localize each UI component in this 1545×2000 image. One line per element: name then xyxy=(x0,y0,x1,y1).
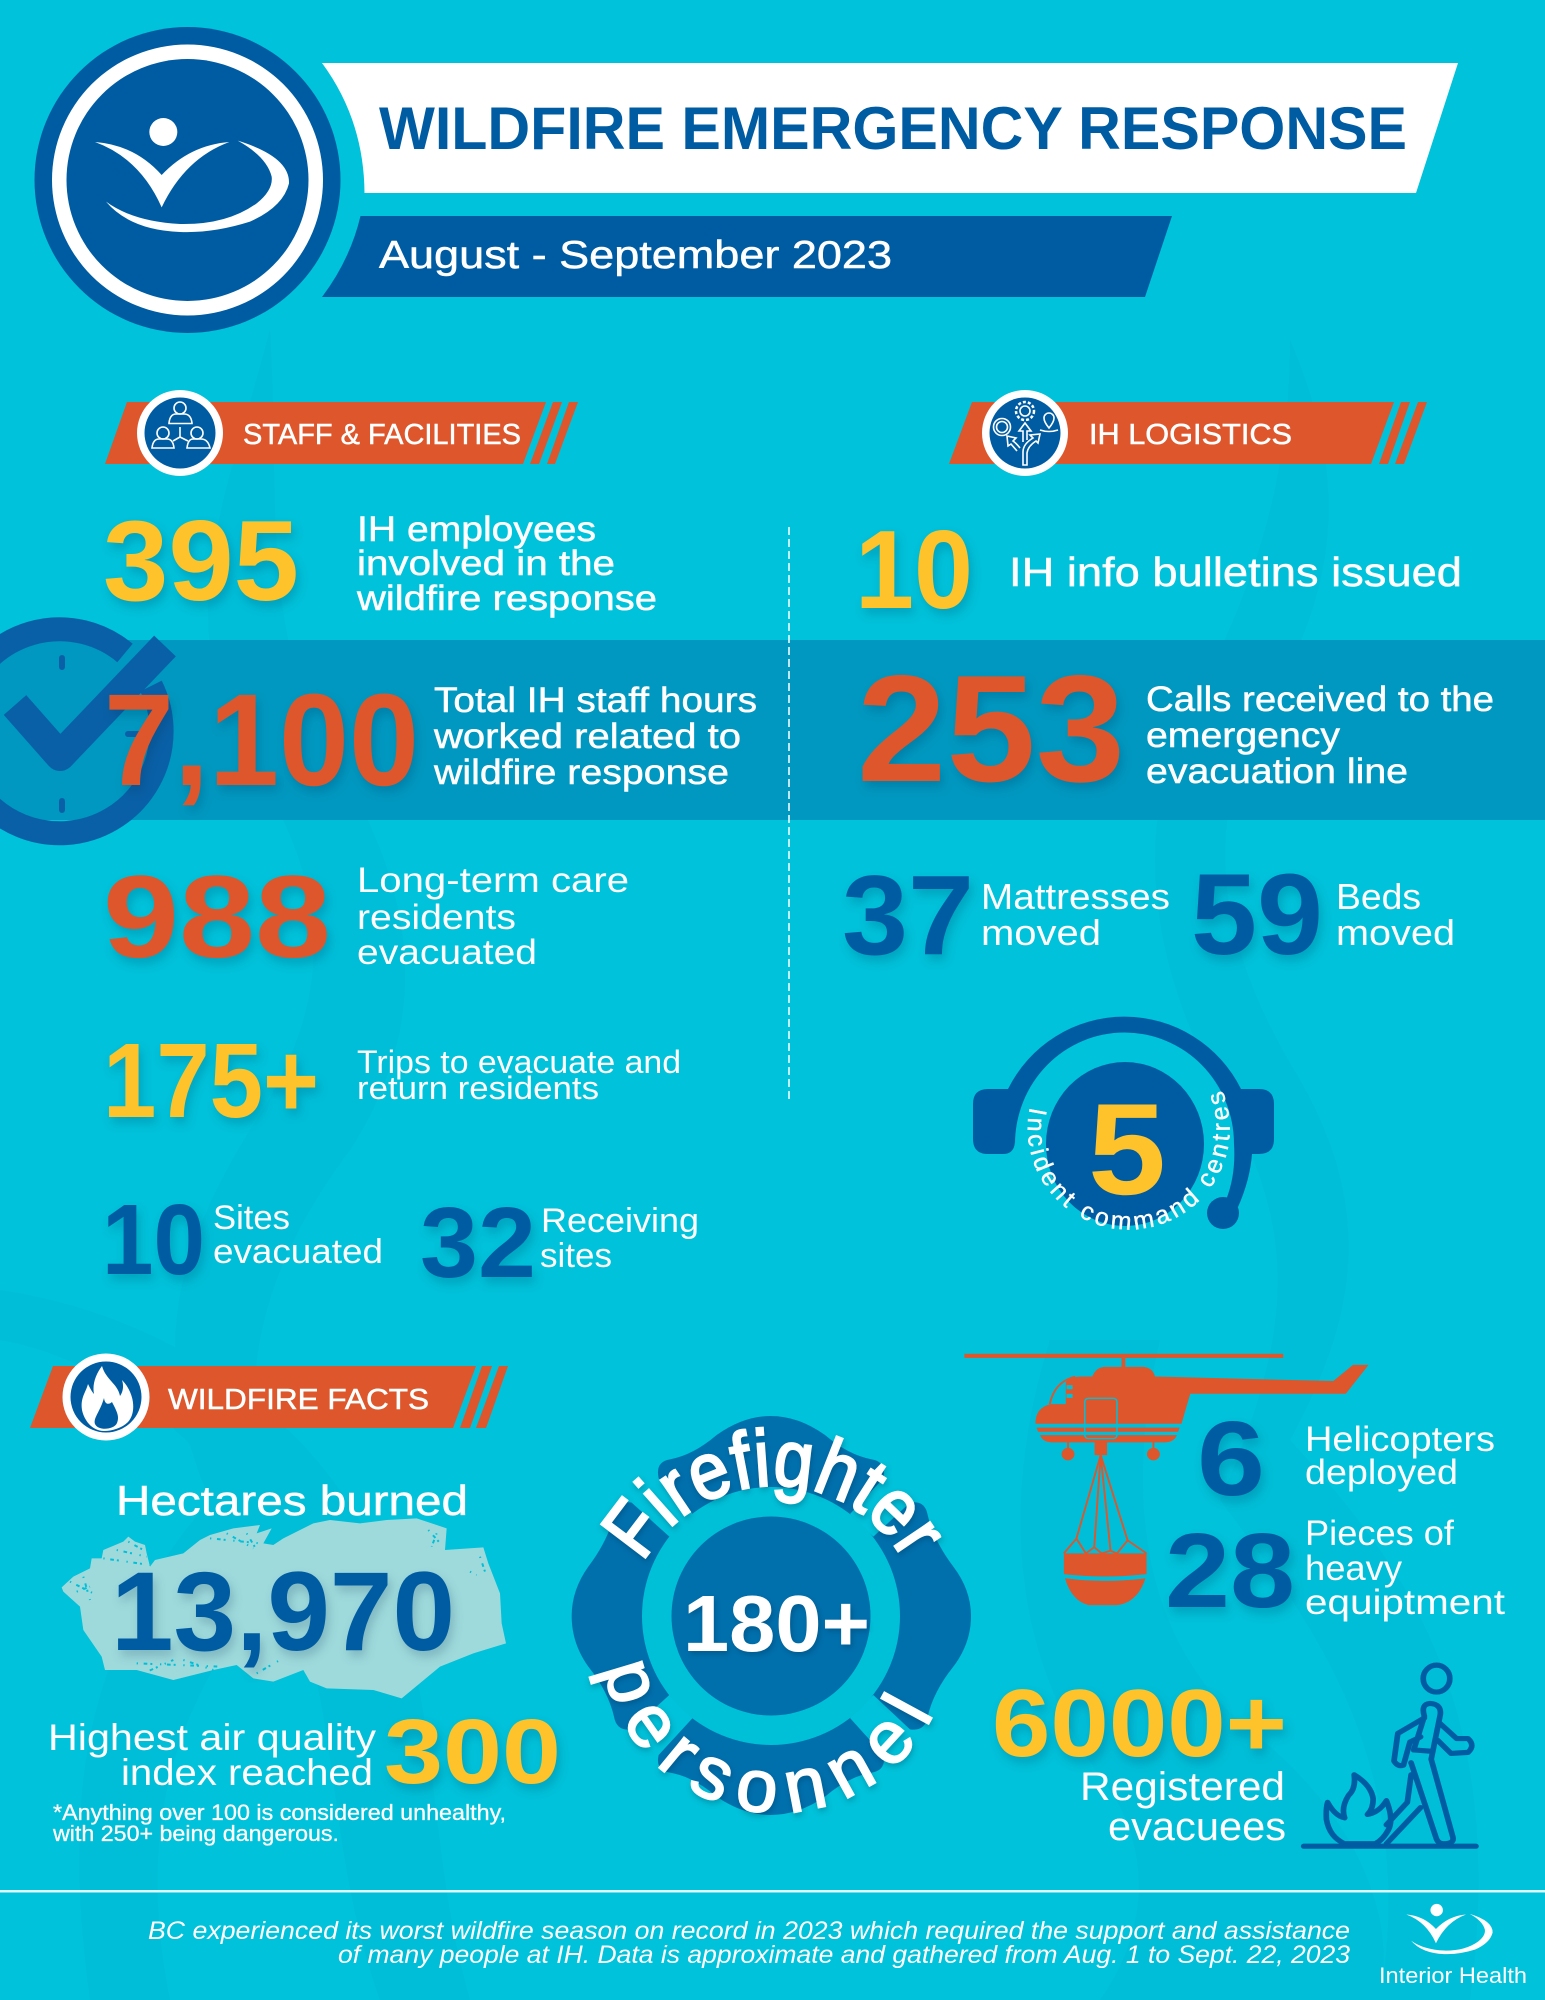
stat: 28 heavy equipment: Pieces of xyxy=(1305,1514,1454,1553)
stat: 32 receiving sites xyxy=(420,1187,699,1299)
stat: 10 sites xyxy=(102,1184,383,1296)
stat: 59 beds: Beds xyxy=(1336,876,1421,917)
stat: 175+ trips: Trips to evacuate and xyxy=(357,1044,681,1080)
stat: 395 employees: wildfire response xyxy=(356,579,657,618)
stat: 28 heavy equipment: equiptment xyxy=(1305,1583,1505,1622)
stat: 253 calls: 253 xyxy=(857,644,1125,814)
stat: 32 receiving sites: sites xyxy=(540,1237,612,1275)
stat: air quality 300: Highest air quality xyxy=(48,1717,377,1758)
stat: 253 calls xyxy=(857,644,1494,814)
label: incident command centres: Incident command centres xyxy=(1027,1092,1230,1230)
stat: 988 residents: Long-term care xyxy=(357,861,629,900)
date banner xyxy=(322,216,1172,297)
footer note: of many people at IH. Data is approximate and gathered from Aug. 1 to Sept. 22, 2023 xyxy=(338,1941,1350,1969)
stat: 7,100 hours: 7,100 xyxy=(104,666,419,813)
stat: 10 bulletins: IH info bulletins issued xyxy=(1009,549,1462,595)
heading: staff and facilities: STAFF & FACILITIES xyxy=(243,419,521,451)
stat: 59 beds xyxy=(1191,851,1455,979)
stat: 988 residents xyxy=(103,851,629,982)
footnote: with 250+ being dangerous. xyxy=(52,1821,339,1846)
stat: air quality 300: index reached xyxy=(121,1752,373,1793)
footer rule xyxy=(0,1890,1545,1892)
stat: 10 sites: evacuated xyxy=(213,1233,383,1271)
stat: 37 mattresses: Mattresses xyxy=(981,876,1170,917)
heading: IH logistics xyxy=(949,390,1427,476)
stat: 175+ trips: return residents xyxy=(357,1070,599,1106)
stat: 395 employees: 395 xyxy=(103,498,299,625)
stat: 10 bulletins: 10 xyxy=(855,508,973,632)
stat: 7,100 hours xyxy=(104,666,757,813)
stat: 10 sites: 10 xyxy=(102,1184,205,1296)
stat: 6000+ evacuees: Registered xyxy=(1080,1765,1285,1809)
stat: 6 helicopters: 6 xyxy=(1197,1400,1265,1518)
stat: 6000+ evacuees: evacuees xyxy=(1108,1805,1286,1849)
stat: air quality 300 xyxy=(48,1701,561,1846)
stat: 32 receiving sites: 32 xyxy=(420,1187,536,1299)
footer logo xyxy=(1379,1904,1527,1988)
stat: 6 helicopters: deployed xyxy=(1305,1453,1458,1492)
stat: 10 sites: Sites xyxy=(213,1199,290,1237)
stat: 6000+ evacuees: 6000+ xyxy=(992,1670,1287,1777)
divider xyxy=(788,527,790,1100)
icon: clock with check mark xyxy=(0,629,165,833)
icon: flame xyxy=(82,1366,133,1431)
stat: 7,100 hours: worked related to xyxy=(433,717,741,756)
icon: logistics arrows xyxy=(994,402,1058,465)
stat: 37 mattresses: 37 xyxy=(842,852,974,978)
stat: 7,100 hours: wildfire response xyxy=(433,753,729,792)
stat: 28 heavy equipment: 28 xyxy=(1165,1512,1295,1630)
stat: hectares burned: 13,970 xyxy=(111,1549,455,1674)
footer note xyxy=(148,1917,1350,1969)
heading: staff and facilities xyxy=(105,390,578,476)
header logo circle xyxy=(34,27,340,333)
stat: 253 calls: emergency xyxy=(1146,716,1341,755)
title banner xyxy=(322,63,1458,193)
stat: 395 employees: IH employees xyxy=(357,510,596,549)
stat: 6 helicopters: Helicopters xyxy=(1305,1420,1495,1459)
heading: wildfire facts xyxy=(30,1354,508,1440)
icon: Interior Health figure xyxy=(95,118,289,232)
stat: 6000+ evacuees xyxy=(992,1670,1287,1849)
icon: staff network xyxy=(152,402,210,448)
stat: 253 calls: evacuation line xyxy=(1146,752,1408,791)
stat: 6 helicopters xyxy=(1197,1400,1495,1518)
stat: air quality 300: 300 xyxy=(384,1701,561,1803)
stat: 395 employees xyxy=(103,498,657,625)
stat: 28 heavy equipment xyxy=(1165,1512,1505,1630)
stat: 395 employees: involved in the xyxy=(357,544,615,583)
heading: wildfire facts: WILDFIRE FACTS xyxy=(168,1384,429,1416)
footer note: BC experienced its worst wildfire season on record in 2023 which required the support and assistance xyxy=(148,1917,1350,1945)
stat: 253 calls: Calls received to the xyxy=(1146,680,1494,719)
icon: person walking from fire xyxy=(1304,1665,1476,1846)
footer logo: Interior Health xyxy=(1379,1963,1527,1988)
stat: 32 receiving sites: Receiving xyxy=(541,1202,699,1240)
firefighter badge xyxy=(572,1416,971,1818)
footnote xyxy=(52,1800,506,1846)
label: firefighter: Firefighter xyxy=(600,1426,944,1562)
icon: headset with 5 incident command centres xyxy=(973,1016,1274,1230)
stat: 988 residents: residents xyxy=(357,898,516,937)
stat: 37 mattresses: moved xyxy=(981,912,1101,953)
footnote: *Anything over 100 is considered unhealthy, xyxy=(53,1800,506,1825)
stat: 175+ trips xyxy=(103,1022,681,1140)
title: WILDFIRE EMERGENCY RESPONSE xyxy=(379,95,1407,162)
date: August - September 2023 xyxy=(379,234,892,277)
stat: 988 residents: evacuated xyxy=(357,933,537,972)
highlight band xyxy=(0,640,1545,820)
stat: hectares burned: Hectares burned xyxy=(116,1477,468,1524)
stat: 175+ trips: 175+ xyxy=(103,1022,319,1140)
label: personnel: personnel xyxy=(588,1660,935,1818)
stat: 988 residents: 988 xyxy=(103,851,331,982)
firefighter badge: 180+ xyxy=(683,1579,870,1668)
stat: 28 heavy equipment: heavy xyxy=(1305,1549,1403,1588)
icon: helicopter with bucket xyxy=(964,1354,1369,1605)
stat: 37 mattresses xyxy=(842,852,1170,978)
stat: 10 bulletins xyxy=(855,508,1462,632)
stat: hectares burned xyxy=(62,1477,506,1698)
brush stroke xyxy=(62,1518,506,1698)
heading: IH logistics: IH LOGISTICS xyxy=(1089,419,1292,451)
stat: 59 beds: moved xyxy=(1336,912,1455,953)
stat: 59 beds: 59 xyxy=(1191,851,1323,979)
stat: 7,100 hours: Total IH staff hours xyxy=(434,681,757,720)
icon: headset with 5 incident command centres: 5 xyxy=(1088,1076,1166,1222)
